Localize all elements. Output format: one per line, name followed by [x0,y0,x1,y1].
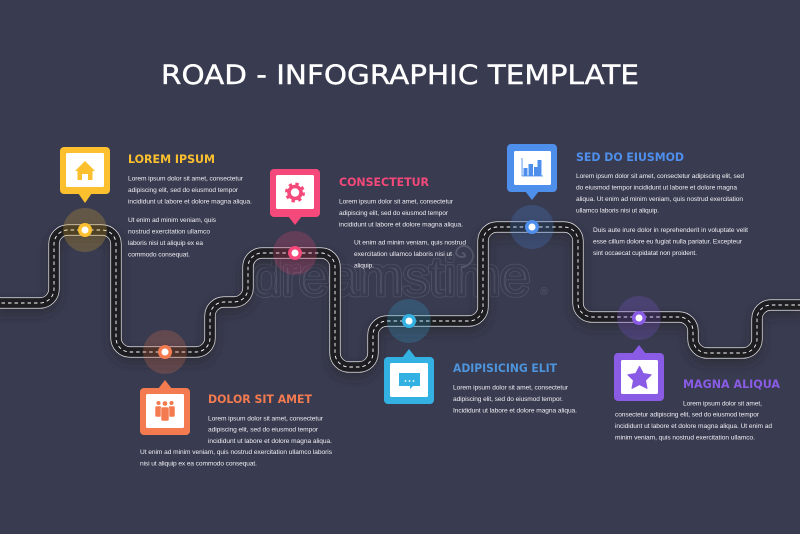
text block: dolor sit amet [140,392,333,468]
text block: dolor sit amet: nisi ut aliquip ex ea commodo consequat. [140,460,257,468]
icon: people [155,401,175,421]
text block: lorem ipsum: Lorem ipsum dolor sit amet, consectetur [128,176,244,182]
text block: magna aliqua: MAGNA ALIQUA [683,377,780,391]
text block: dolor sit amet: Lorem ipsum dolor sit amet, consectetur [208,416,324,422]
text block: lorem ipsum: commodo consequat. [128,252,190,258]
text block: sed do eiusmod: aliqua. Ut enim ad minim veniam, quis nostrud exercitation [576,196,743,203]
text block: dolor sit amet: adipiscing elit, sed do eiusmod tempor [208,426,319,434]
marker: purple [617,296,661,340]
icon: gear [286,184,304,201]
text block: dolor sit amet: DOLOR SIT AMET [208,392,312,406]
pin: gear [270,169,320,225]
marker: pink [273,231,317,275]
marker: orange [143,330,187,374]
pin: home [60,147,110,203]
text block: sed do eiusmod: ullamco laboris nisi ut aliquip. [576,208,659,214]
text block: magna aliqua: incididunt ut labore et dolore magna aliqua. Ut enim ad [615,423,772,430]
text block: lorem ipsum: LOREM IPSUM [128,152,215,166]
text block: sed do eiusmod: sint occaecat cupidatat non proident. [593,250,697,257]
text block: magna aliqua: consectetur adipiscing elit, sed do eiusmod tempor [615,412,760,418]
text block: lorem ipsum: adipiscing elit, sed do eiusmod tempor [128,187,239,194]
text block: consectetur: aliquip. [354,262,374,270]
text block: lorem ipsum: Ut enim ad minim veniam, quis [128,217,217,224]
marker: yellow [63,208,107,252]
text block: consectetur [339,175,466,270]
text block: adipisicing elit: adipiscing elit, sed do eiusmod tempor. [453,396,563,403]
marker: blue [510,205,554,249]
road [0,227,800,372]
text block: lorem ipsum: laboris nisi ut aliquip ex ea [128,240,203,247]
pin: star [614,345,664,401]
watermark: ® [540,286,548,298]
text block: adipisicing elit: ADIPISICING ELIT [453,361,557,375]
text block: magna aliqua: minim veniam, quis nostrud exercitation ullamco. [615,434,755,442]
text block: consectetur: CONSECTETUR [339,175,429,189]
text block: consectetur: Ut enim ad minim veniam, quis nostrud [354,240,466,246]
text block: sed do eiusmod: Duis aute irure dolor in reprehenderit in voluptate velit [593,227,748,234]
text block: consectetur: adipiscing elit, sed do eiusmod tempor [339,210,449,217]
text block: dolor sit amet: incididunt ut labore et dolore magna aliqua. [208,438,332,445]
text block: lorem ipsum: nostrud exercitation ullamco [128,228,210,236]
text block: magna aliqua [615,377,780,442]
text block: consectetur: incididunt ut labore et dolore magna aliqua. [339,222,463,228]
pin: people [140,380,190,435]
text block: sed do eiusmod [576,150,748,257]
icon: star [628,366,651,388]
pin: chat [384,349,434,404]
icon: chat bubble [399,373,420,389]
text block: adipisicing elit: Incididunt ut labore et dolore magna aliqua. [453,408,577,414]
text block: adipisicing elit [453,361,577,414]
pin: chart [507,144,557,200]
text block: sed do eiusmod: Lorem ipsum dolor sit amet, consectetur adipiscing elit, sed [576,173,744,180]
text block: consectetur: exercitation ullamco laboris nisi ut [354,251,452,258]
icon: bar chart [522,158,543,176]
text block: magna aliqua: Lorem ipsum dolor sit amet, [683,400,762,408]
text block: lorem ipsum: incididunt ut labore et dolore magna aliqua. [128,198,252,206]
text block: sed do eiusmod: SED DO EIUSMOD [576,150,684,164]
icon: house [75,161,95,180]
text block: lorem ipsum [128,152,252,258]
title: ROAD - INFOGRAPHIC TEMPLATE [161,60,639,91]
watermark: dreamstime [252,247,530,307]
marker: cyan [387,299,431,343]
text block: adipisicing elit: Lorem ipsum dolor sit amet, consectetur [453,384,569,392]
text block: sed do eiusmod: do eiusmod tempor incididunt ut labore et dolore magna [576,184,737,192]
text block: sed do eiusmod: esse cillum dolore eu fugiat nulla pariatur. Excepteur [593,238,743,246]
text block: dolor sit amet: Ut enim ad minim veniam, quis nostrud exercitation ullamco laboris [140,449,333,456]
watermark: dreamstime [252,247,530,307]
text block: consectetur: Lorem ipsum dolor sit amet, consectetur [339,198,454,206]
